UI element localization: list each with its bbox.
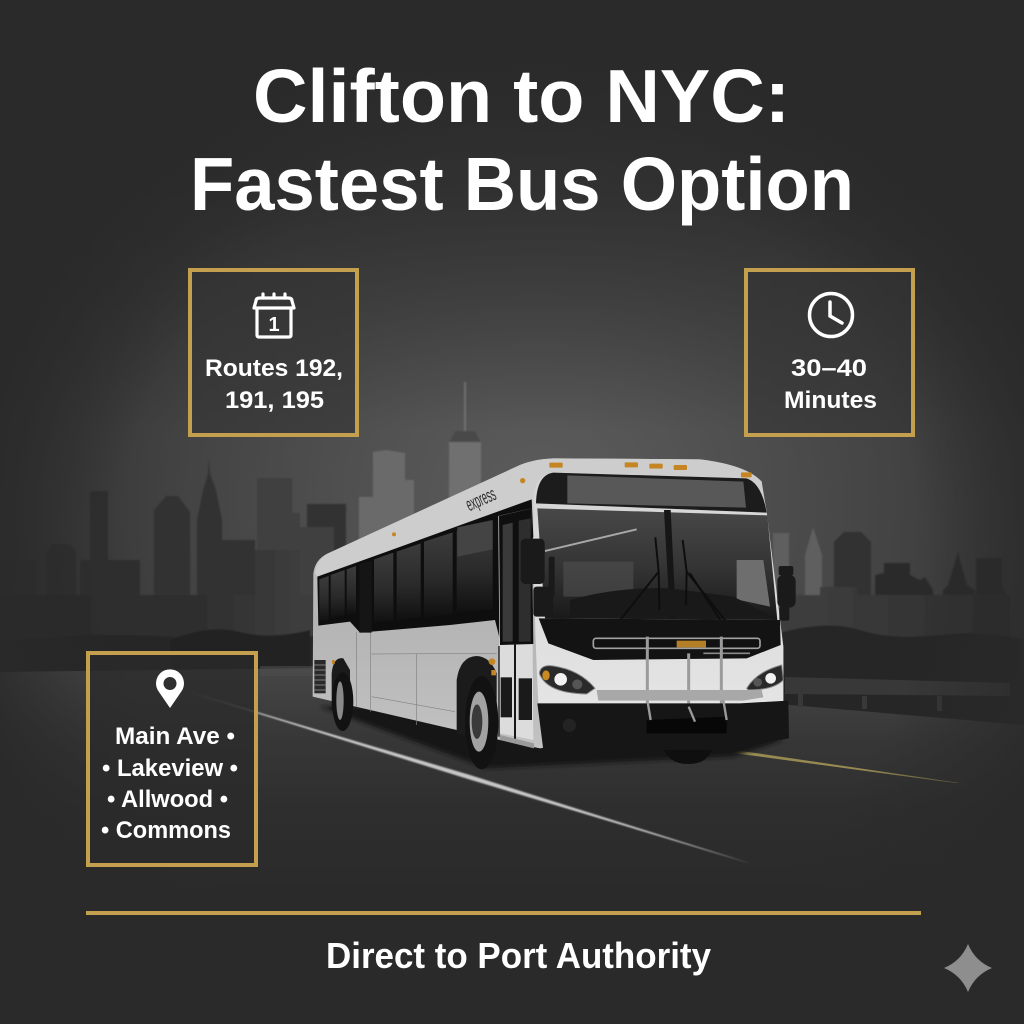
side window band xyxy=(317,499,533,640)
wheel arches xyxy=(332,658,350,710)
front door xyxy=(498,508,534,748)
front face xyxy=(533,472,783,703)
front rack and grille xyxy=(593,637,760,720)
icon: calendar: 1 xyxy=(268,314,280,336)
title: Fastest Bus Option xyxy=(190,142,854,226)
front bumper xyxy=(537,701,789,751)
road yellow centre line xyxy=(733,750,960,783)
city skyline xyxy=(0,382,1024,725)
routes label: 191, 195 xyxy=(225,387,324,414)
lower chrome bar xyxy=(597,690,763,701)
side panel lines xyxy=(357,632,497,725)
routes label xyxy=(205,355,343,414)
road white edge line xyxy=(186,691,752,864)
icon: clock xyxy=(810,294,852,336)
gold divider xyxy=(86,911,921,915)
front tyre under bumper xyxy=(664,750,712,764)
panel: travel time xyxy=(746,270,913,435)
stops label: • Allwood • xyxy=(107,786,228,813)
guardrail xyxy=(785,677,1010,711)
wipers xyxy=(608,537,737,635)
travel time label xyxy=(784,355,877,414)
bus body side xyxy=(313,458,783,748)
routes label: Routes 192, xyxy=(205,355,343,382)
stops label xyxy=(101,723,238,844)
icon: sparkle xyxy=(944,944,992,992)
icon: location pin xyxy=(156,669,184,708)
travel time label: Minutes xyxy=(784,387,877,414)
front black band xyxy=(539,618,781,660)
windshield xyxy=(537,508,777,620)
stops label: • Commons xyxy=(101,817,231,844)
rear vent xyxy=(314,660,326,693)
rear wheel xyxy=(332,672,353,731)
icon: calendar xyxy=(254,294,294,337)
title: Clifton to NYC: xyxy=(253,54,790,138)
tree line xyxy=(0,625,1024,725)
travel time label: 30–40 xyxy=(791,355,867,382)
marker lights xyxy=(332,462,752,675)
bus shadow xyxy=(320,703,783,768)
panel: routes xyxy=(190,270,357,435)
panel: stops xyxy=(88,653,256,865)
road xyxy=(0,666,1024,1024)
bus name lettering: express xyxy=(463,484,499,516)
front wheel xyxy=(465,676,498,769)
far right and centre towers xyxy=(449,382,481,520)
bus roof xyxy=(315,458,767,577)
bus xyxy=(313,458,796,769)
destination sign xyxy=(536,473,767,513)
side door xyxy=(359,561,372,633)
footer caption: Direct to Port Authority xyxy=(326,935,711,976)
stops label: Main Ave • xyxy=(115,723,235,750)
title xyxy=(190,54,854,226)
left headlight xyxy=(539,666,595,694)
right headlight xyxy=(747,665,783,690)
stops label: • Lakeview • xyxy=(102,755,238,782)
mirrors xyxy=(521,539,796,621)
